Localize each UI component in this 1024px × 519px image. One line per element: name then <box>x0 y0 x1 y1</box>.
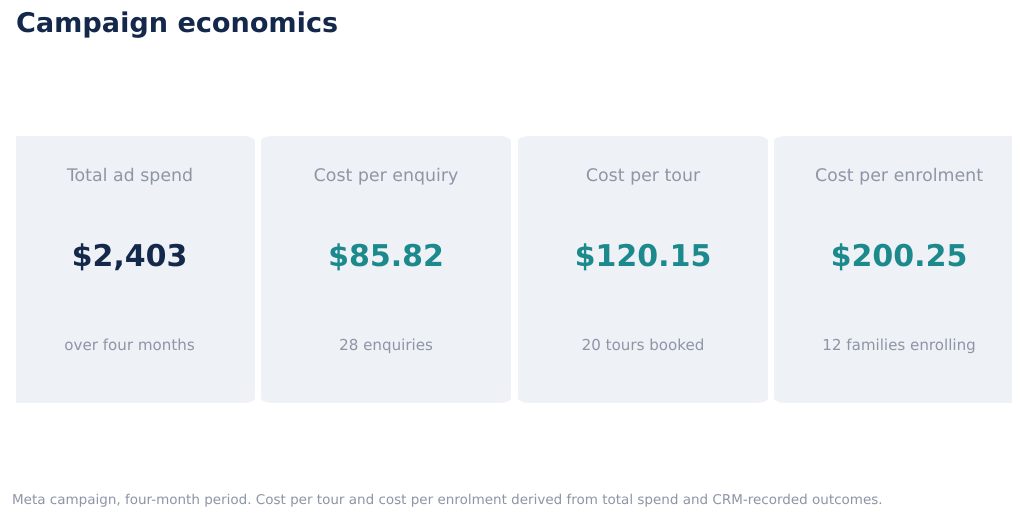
note: cost per enquiry: 28 enquiries <box>339 336 433 354</box>
note: cost per tour: 20 tours booked <box>582 336 704 354</box>
note: total ad spend: over four months <box>64 336 195 354</box>
panel: total ad spend <box>16 136 255 403</box>
value: cost per enrolment: $200.25 <box>831 239 967 274</box>
panel: cost per enquiry <box>261 136 511 403</box>
title: Campaign economics <box>16 8 338 39</box>
label: cost per enrolment: Cost per enrolment <box>815 166 983 186</box>
footnote: Meta campaign, four-month period. Cost per tour and cost per enrolment derived from total spend and CRM-recorded outcomes. <box>12 492 883 508</box>
label: cost per tour: Cost per tour <box>586 166 700 186</box>
panel: cost per tour <box>518 136 768 403</box>
value: total ad spend: $2,403 <box>72 239 187 274</box>
note: cost per enrolment: 12 families enrolling <box>822 336 976 354</box>
label: total ad spend: Total ad spend <box>67 166 193 186</box>
label: cost per enquiry: Cost per enquiry <box>314 166 458 186</box>
value: cost per tour: $120.15 <box>575 239 711 274</box>
panel: cost per enrolment <box>774 136 1012 403</box>
value: cost per enquiry: $85.82 <box>328 239 444 274</box>
